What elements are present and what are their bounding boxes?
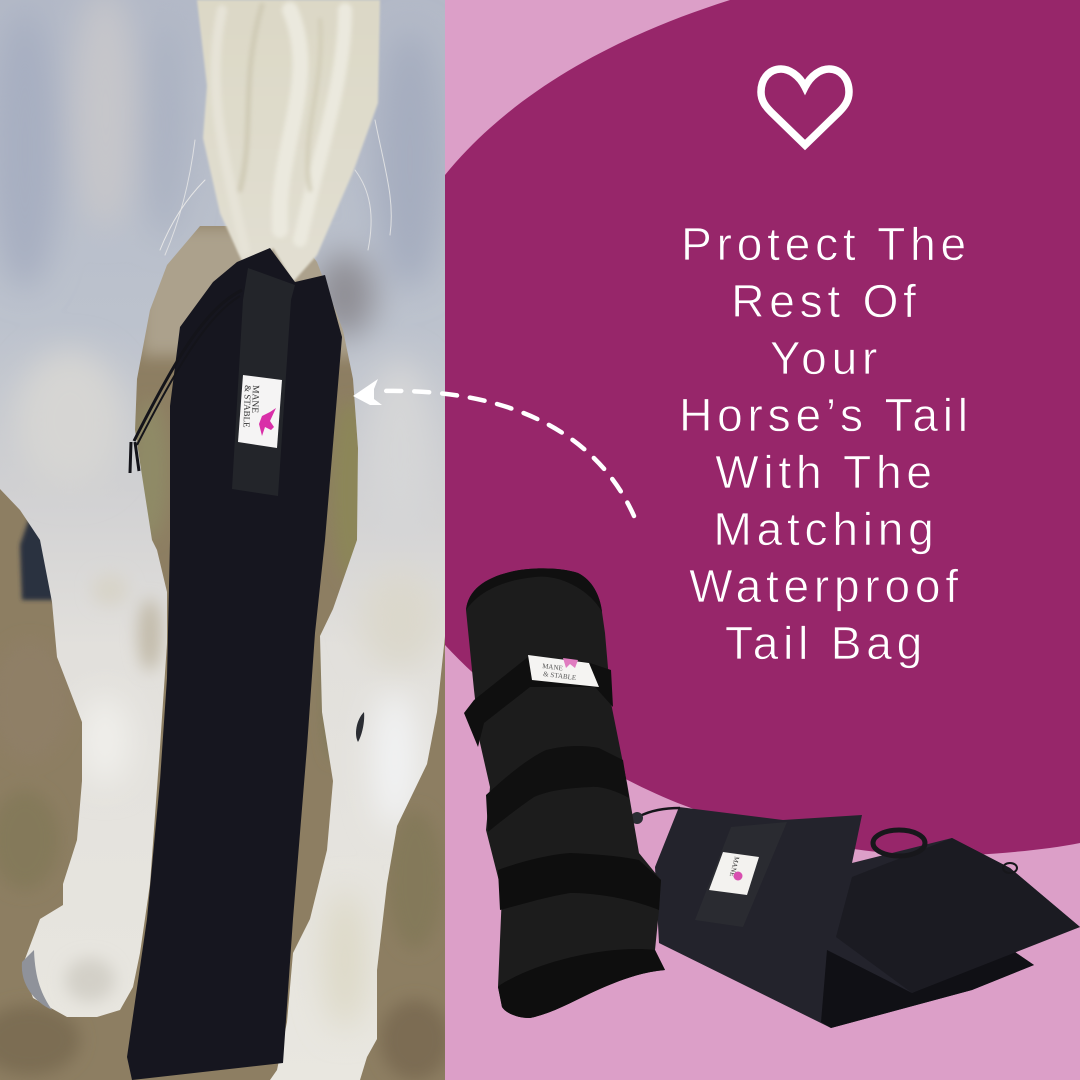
photo: ground texture (0, 226, 450, 1080)
arrowhead (353, 379, 382, 405)
photo: brand label (238, 375, 282, 448)
headline: With The (715, 446, 937, 498)
photo: white tail hair (197, 0, 380, 282)
photo: drawcord (128, 360, 176, 473)
photo: dark boot in background (20, 516, 56, 600)
product: fleece lower roll (498, 949, 665, 1018)
headline: Waterproof (689, 560, 963, 612)
product: bag label: MANE (728, 855, 741, 877)
headline: Matching (713, 503, 939, 555)
product: fleece top rim (466, 568, 602, 612)
product: wrap logo (563, 658, 578, 668)
photo: black tail bag (127, 248, 342, 1080)
product: hair tie (873, 830, 925, 856)
photo: coat shading (0, 0, 445, 1030)
product: rolled fleece tail wrap (464, 568, 665, 1018)
product: velcro strap top (464, 657, 613, 747)
headline: Rest Of (731, 275, 921, 327)
photo: tail hair strands (160, 5, 391, 255)
headline: Tail Bag (725, 617, 927, 669)
photo: brand label: MANE (249, 385, 260, 413)
product: wrap label: & STABLE (543, 670, 577, 682)
product: drawcord toggle (631, 808, 680, 824)
arrow: dashed curve pointing to bag (353, 379, 634, 516)
headline: Protect The (681, 218, 971, 270)
headline: Horse’s Tail (679, 389, 973, 441)
photo: hoof (22, 950, 52, 1010)
product: bag strap (695, 822, 787, 927)
product: lower bag fold (821, 950, 1034, 1028)
product: wrap label (528, 655, 599, 687)
panel: horse photo (0, 0, 450, 1080)
photo: brand label: & STABLE (241, 385, 253, 428)
product: small loop (1003, 863, 1017, 873)
headline (679, 218, 973, 669)
headline: Your (770, 332, 882, 384)
icon: heart outline (761, 69, 849, 145)
product: velcro strap bottom (498, 853, 661, 910)
photo: horse hindquarters and legs (0, 0, 445, 1080)
product: bag logo (734, 872, 742, 880)
product: bag folded flap (836, 838, 1080, 993)
photo: webbing strap (232, 268, 295, 496)
photo: dark leg mark (356, 712, 364, 742)
product: velcro strap middle (486, 746, 629, 832)
product: bag label (709, 852, 759, 895)
panel: purple background shape (445, 0, 1080, 856)
product: folded black tail bag (631, 807, 1080, 1028)
photo: pink logo (259, 408, 276, 436)
product: wrap label: MANE (542, 662, 563, 672)
